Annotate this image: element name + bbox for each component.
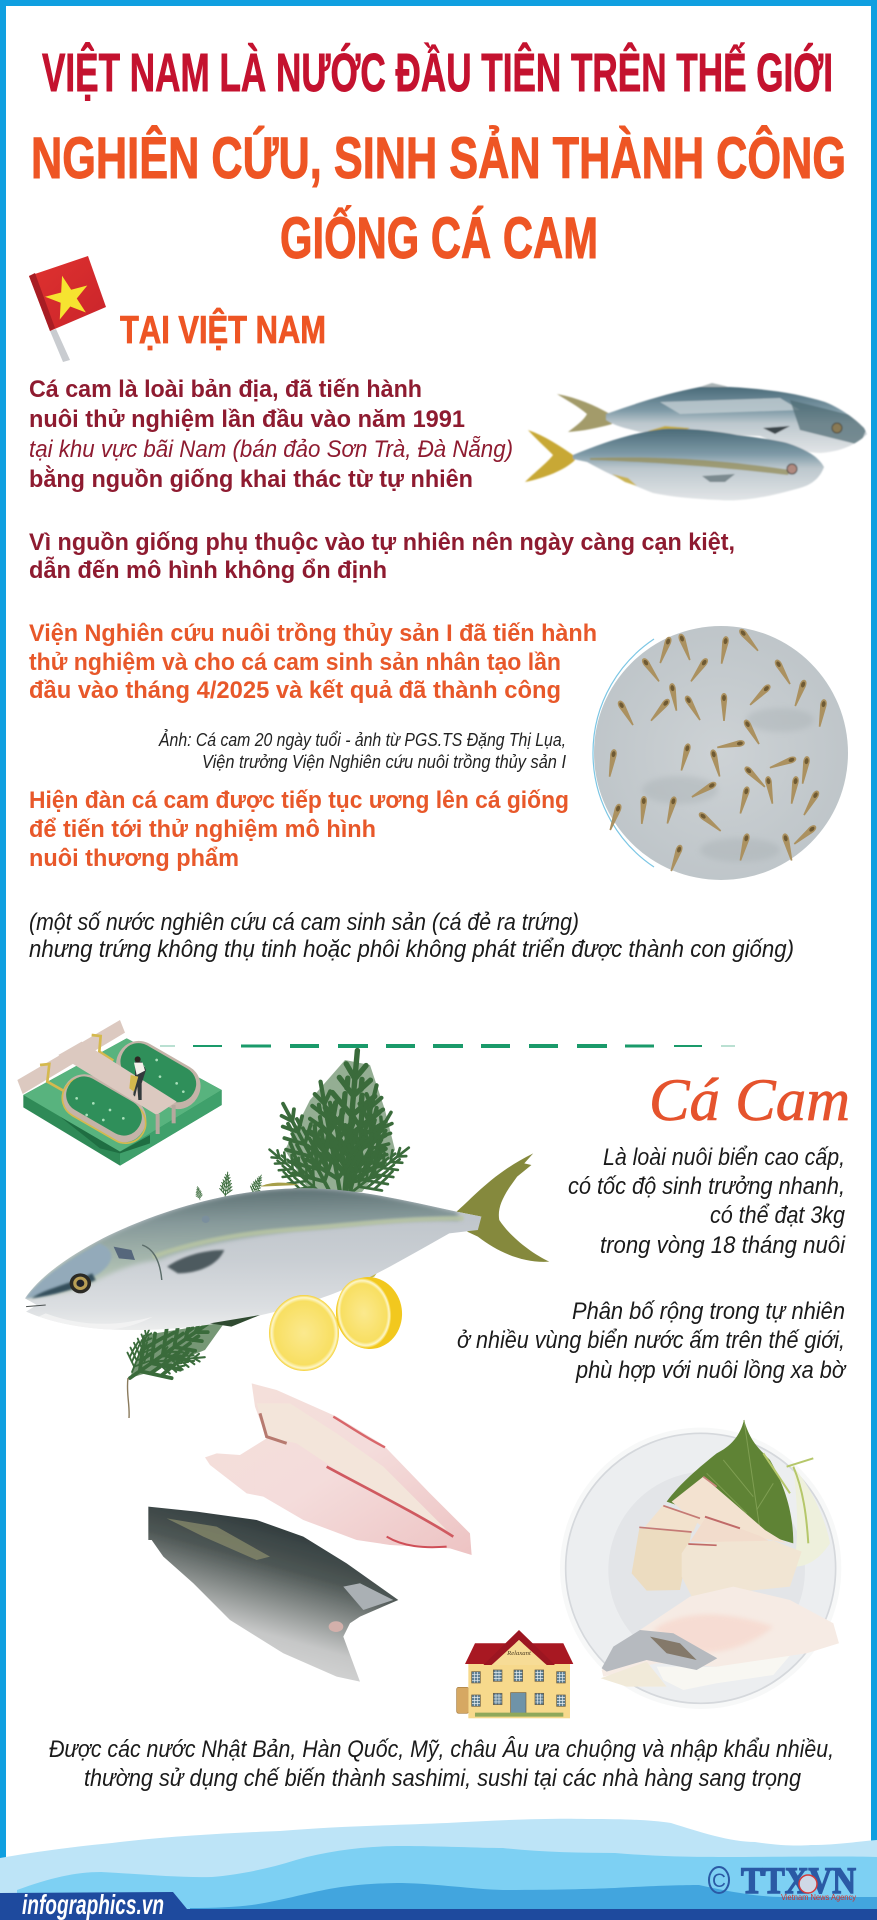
- text block: native species: bằng nguồn giống khai thác từ tự nhiên: [29, 465, 473, 493]
- photo: two amberjack fish: [525, 383, 870, 500]
- text block: premium sea fish: trong vòng 18 tháng nuôi: [600, 1232, 846, 1259]
- logo: TTXVN: C: [712, 1871, 726, 1892]
- photo: dark skin fish fillet: [148, 1507, 398, 1682]
- text block: native species: [29, 376, 513, 493]
- title: [31, 42, 846, 271]
- text block: premium sea fish: có thể đạt 3kg: [710, 1202, 846, 1229]
- text block: native species: tại khu vực bãi Nam (bán đảo Sơn Trà, Đà Nẵng): [29, 435, 513, 463]
- text block: depends on nature: dẫn đến mô hình không ổn định: [29, 556, 387, 584]
- icon: restaurant building: [457, 1630, 573, 1718]
- icon: fern garnish: [116, 1048, 419, 1418]
- text block: distribution: ở nhiều vùng biển nước ấm trên thế giới,: [457, 1327, 845, 1354]
- text block: artificial breeding: thử nghiệm và cho cá cam sinh sản nhân tạo lần: [29, 649, 561, 676]
- text block: distribution: phù hợp với nuôi lồng xa bờ: [575, 1357, 847, 1384]
- text block: native species: Cá cam là loài bản địa, đã tiến hành: [29, 376, 422, 403]
- text block: distribution: [457, 1298, 847, 1384]
- text block: artificial breeding: [29, 620, 597, 704]
- heading: in Vietnam: TẠI VIỆT NAM: [120, 308, 326, 352]
- photo caption: Ảnh: Cá cam 20 ngày tuổi - ảnh từ PGS.TS Đặng Thị Lụa,: [158, 729, 566, 750]
- photo caption: Viện trưởng Viện Nghiên cứu nuôi trồng thủy sản I: [202, 752, 566, 772]
- text block: raising stock: [29, 787, 569, 872]
- text block: raising stock: nuôi thương phẩm: [29, 845, 239, 872]
- text block: depends on nature: Vì nguồn giống phụ thuộc vào tự nhiên nên ngày càng cạn kiệt,: [29, 529, 735, 556]
- text block: premium sea fish: [568, 1144, 846, 1259]
- text block: export markets: thường sử dụng chế biến thành sashimi, sushi tại các nhà hàng sang trọng: [84, 1765, 802, 1792]
- photo: sashimi and sushi plate: [560, 1420, 841, 1709]
- text block: artificial breeding: đầu vào tháng 4/2025 và kết quả đã thành công: [29, 677, 561, 704]
- icon: isometric fish tanks: [17, 1020, 222, 1166]
- text block: raising stock: Hiện đàn cá cam được tiếp tục ương lên cá giống: [29, 787, 569, 814]
- text block: export markets: [49, 1736, 834, 1792]
- photo: fish larvae circle: [593, 626, 848, 880]
- heading: Cá Cam: Cá Cam: [649, 1067, 850, 1133]
- footer brand: infographics.vn: infographics.vn: [22, 1889, 164, 1920]
- text block: artificial breeding: Viện Nghiên cứu nuôi trồng thủy sản I đã tiến hành: [29, 620, 597, 647]
- text block: raising stock: để tiến tới thử nghiệm mô hình: [29, 816, 376, 843]
- text block: distribution: Phân bố rộng trong tự nhiên: [572, 1298, 845, 1325]
- photo: pink fish fillet: [205, 1383, 472, 1555]
- icon: Vietnam flag: [29, 256, 106, 362]
- lemon halves: [269, 1273, 407, 1371]
- text block: premium sea fish: có tốc độ sinh trưởng nhanh,: [568, 1173, 845, 1200]
- text block: native species: nuôi thử nghiệm lần đầu vào năm 1991: [29, 406, 465, 433]
- text block: other countries note: (một số nước nghiên cứu cá cam sinh sản (cá đẻ ra trứng): [29, 909, 579, 936]
- text block: other countries note: nhưng trứng không thụ tinh hoặc phôi không phát triển được thành con giống): [29, 936, 794, 963]
- text block: premium sea fish: Là loài nuôi biển cao cấp,: [603, 1144, 845, 1171]
- logo: TTXVN: Vietnam News Agency: [781, 1892, 857, 1902]
- text block: depends on nature: [29, 529, 735, 584]
- icon: restaurant building: Relaxant: [506, 1650, 531, 1657]
- title: GIỐNG CÁ CAM: [280, 206, 598, 271]
- text block: other countries note: [29, 909, 794, 963]
- big amberjack fish: [25, 1153, 549, 1330]
- footer waves: [0, 1819, 877, 1920]
- logo: TTXVN: TTXVN: [741, 1861, 856, 1902]
- photo caption: [158, 729, 566, 772]
